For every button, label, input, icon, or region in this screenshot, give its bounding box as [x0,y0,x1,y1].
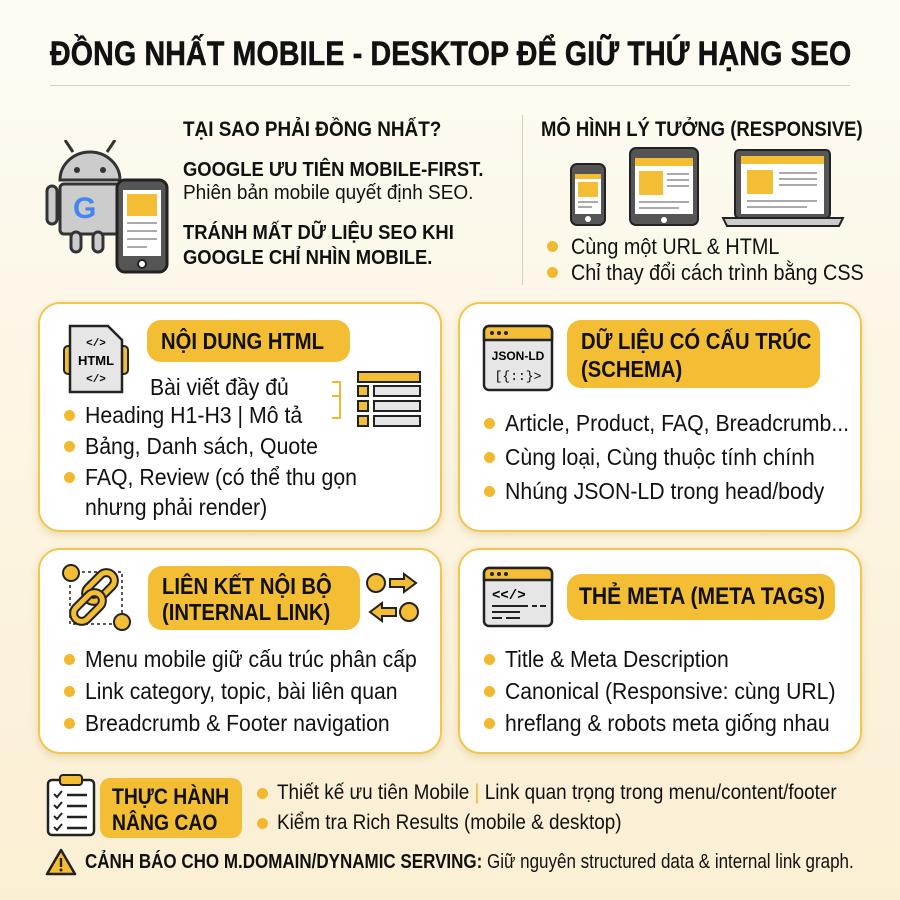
icon: html file [63,324,129,394]
section: why: GOOGLE CHỈ NHÌN MOBILE. [183,247,432,269]
panel: internal link: Link category, topic, bài liên quan [85,678,398,704]
warning: CẢNH BÁO CHO M.DOMAIN/DYNAMIC SERVING: Giữ nguyên structured data & internal link graph. [85,851,854,873]
section: advanced practice [46,774,837,838]
panel: HTML content: Heading H1-H3 | Mô tả [85,402,302,428]
panel: HTML content: Bảng, Danh sách, Quote [85,433,318,459]
pill heading: (INTERNAL LINK) [162,599,330,625]
panel: internal link [38,548,442,754]
pill heading: LIÊN KẾT NỘI BỘ [162,573,332,599]
bullets [484,654,495,665]
section: advanced practice: Kiểm tra Rich Results (mobile & desktop) [277,811,622,834]
icon: json-ld window: JSON-LD [492,349,545,363]
bullets [257,788,268,799]
icon: arrows [366,572,419,623]
section: responsive: Cùng một URL & HTML [571,234,779,259]
icon: json-ld window: [{::}> [495,369,542,384]
pill heading [147,320,350,362]
icon: clipboard [46,774,96,836]
panel: meta tags [458,548,862,754]
icon: layout list [332,371,421,427]
panel: structured data [458,302,862,532]
icon: chain [62,564,131,631]
section: why [46,117,483,274]
panel: structured data: Nhúng JSON-LD trong head/body [505,478,824,504]
pill heading: DỮ LIỆU CÓ CẤU TRÚC [581,328,811,354]
bullets [64,654,75,665]
icon: html file: </> [86,338,106,350]
text: avoid losing data: TRÁNH MẤT DỮ LIỆU SEO KHI [183,222,454,244]
panel: structured data: Cùng loại, Cùng thuộc tính chính [505,444,815,470]
bullets [484,418,495,429]
panel: HTML content: Bài viết đầy đủ [150,374,289,400]
pill heading: NÂNG CAO [112,810,217,835]
title: ĐỒNG NHẤT MOBILE - DESKTOP ĐỂ GIỮ THỨ HẠNG SEO [50,35,851,73]
panel: internal link: Breadcrumb & Footer navigation [85,710,390,736]
panel: HTML content [38,302,442,532]
pill heading [567,320,820,388]
pill heading [148,566,360,630]
section: responsive: Chỉ thay đổi cách trình bằng CSS [571,260,864,285]
icon: code window: <</> [492,588,526,604]
section: advanced practice: Thiết kế ưu tiên Mobile | Link quan trọng trong menu/content/footer [277,781,837,804]
text: mobile-first: GOOGLE ƯU TIÊN MOBILE-FIRST. [183,159,483,181]
section: responsive [541,117,864,285]
icon: html file: </> [86,374,106,386]
panel: structured data: Article, Product, FAQ, Breadcrumb... [505,410,849,436]
panel: meta tags: Canonical (Responsive: cùng URL) [505,678,835,704]
bullets [64,410,75,421]
pill heading [100,778,242,838]
panel: internal link: Menu mobile giữ cấu trúc phân cấp [85,646,417,672]
panel: meta tags: Title & Meta Description [505,646,729,672]
icon: android google phone [46,140,168,274]
pill heading [567,574,835,620]
icon: android google phone: G [73,192,96,225]
icon: html file: HTML [78,353,114,368]
icon: code window [482,566,554,628]
pill heading: THỰC HÀNH [112,784,229,809]
bullets [547,241,558,252]
heading: MÔ HÌNH LÝ TƯỞNG (RESPONSIVE) [541,118,863,141]
section: why: Phiên bản mobile quyết định SEO. [183,182,473,204]
pill heading: (SCHEMA) [581,356,682,382]
panel: HTML content: nhưng phải render) [85,494,267,520]
icon: warning [46,848,76,876]
panel: meta tags: hreflang & robots meta giống nhau [505,710,830,736]
icon: json-ld window [482,324,554,392]
pill heading: NỘI DUNG HTML [161,328,324,354]
pill heading: THẺ META (META TAGS) [579,583,825,610]
icon: devices [570,147,845,227]
panel: HTML content: FAQ, Review (có thể thu gọn [85,464,357,490]
heading: TẠI SAO PHẢI ĐỒNG NHẤT? [183,118,441,141]
